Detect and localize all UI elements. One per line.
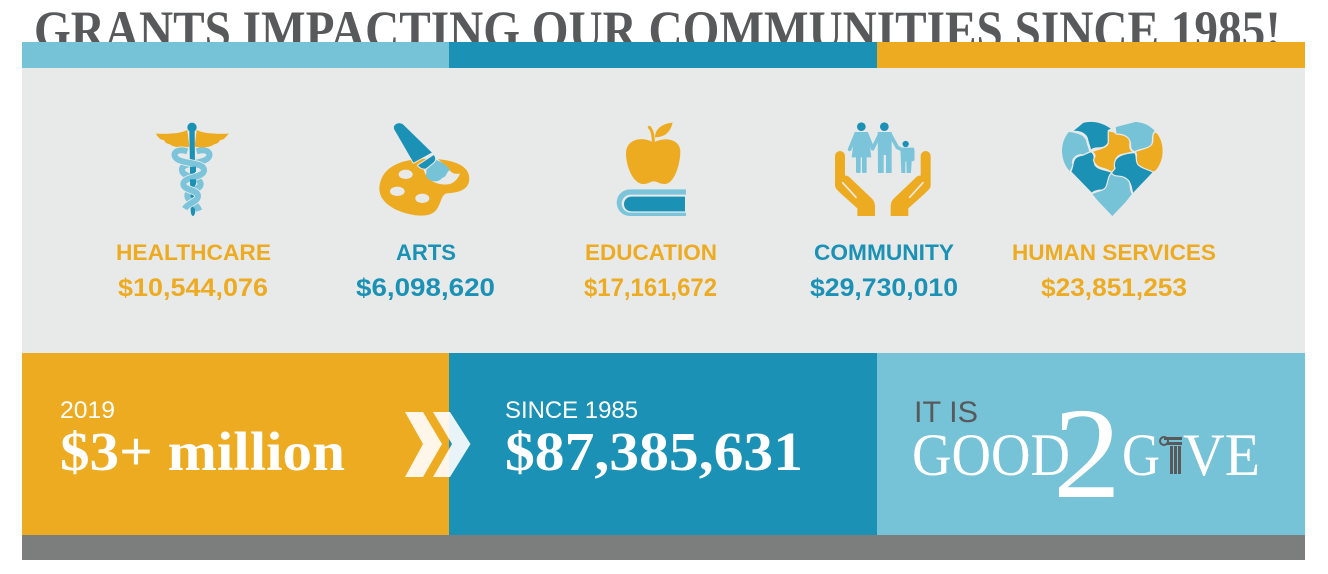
icon: family in caring hands (835, 122, 931, 216)
label: community: $29,730,010 (810, 274, 958, 302)
panel: grant categories (22, 68, 1305, 353)
panel: it is good 2 give: VE (1183, 422, 1260, 488)
label: arts: $6,098,620 (356, 274, 495, 302)
panel: 2019 total (22, 353, 449, 535)
panel: it is good 2 give (877, 353, 1305, 535)
label: human services: $23,851,253 (1041, 274, 1187, 302)
label: healthcare: HEALTHCARE (116, 240, 271, 265)
label: arts (356, 240, 495, 302)
footer bar (22, 535, 1305, 560)
label: education (584, 240, 717, 302)
icon: apple on book (617, 123, 686, 216)
label: education: EDUCATION (585, 240, 717, 265)
panel: it is good 2 give: 2 (1053, 382, 1121, 526)
label: human services (1012, 240, 1216, 302)
label: arts: ARTS (396, 240, 456, 265)
label: human services: HUMAN SERVICES (1012, 240, 1216, 265)
panel: 2019 total: 2019 (60, 397, 115, 424)
panel: total since 1985: SINCE 1985 (505, 397, 638, 424)
panel: 2019 total: $3+ million (60, 421, 345, 482)
icon: puzzle heart (1062, 122, 1163, 216)
label: healthcare (116, 240, 271, 302)
panel: total since 1985 (449, 353, 877, 535)
label: healthcare: $10,544,076 (118, 274, 268, 302)
icon: caduceus (156, 123, 229, 216)
icon: column as letter I (1160, 437, 1182, 474)
panel: total since 1985: $87,385,631 (505, 421, 803, 482)
panel: it is good 2 give: GOOD (912, 422, 1070, 488)
top colour band (22, 42, 1305, 68)
label: community: COMMUNITY (814, 240, 954, 265)
arrow: double chevron (405, 412, 470, 477)
label: education: $17,161,672 (584, 274, 717, 302)
panel: it is good 2 give: G (1122, 422, 1160, 488)
panel: it is good 2 give: IT IS (914, 396, 978, 429)
label: community (810, 240, 958, 302)
icon: paint palette (379, 123, 469, 216)
